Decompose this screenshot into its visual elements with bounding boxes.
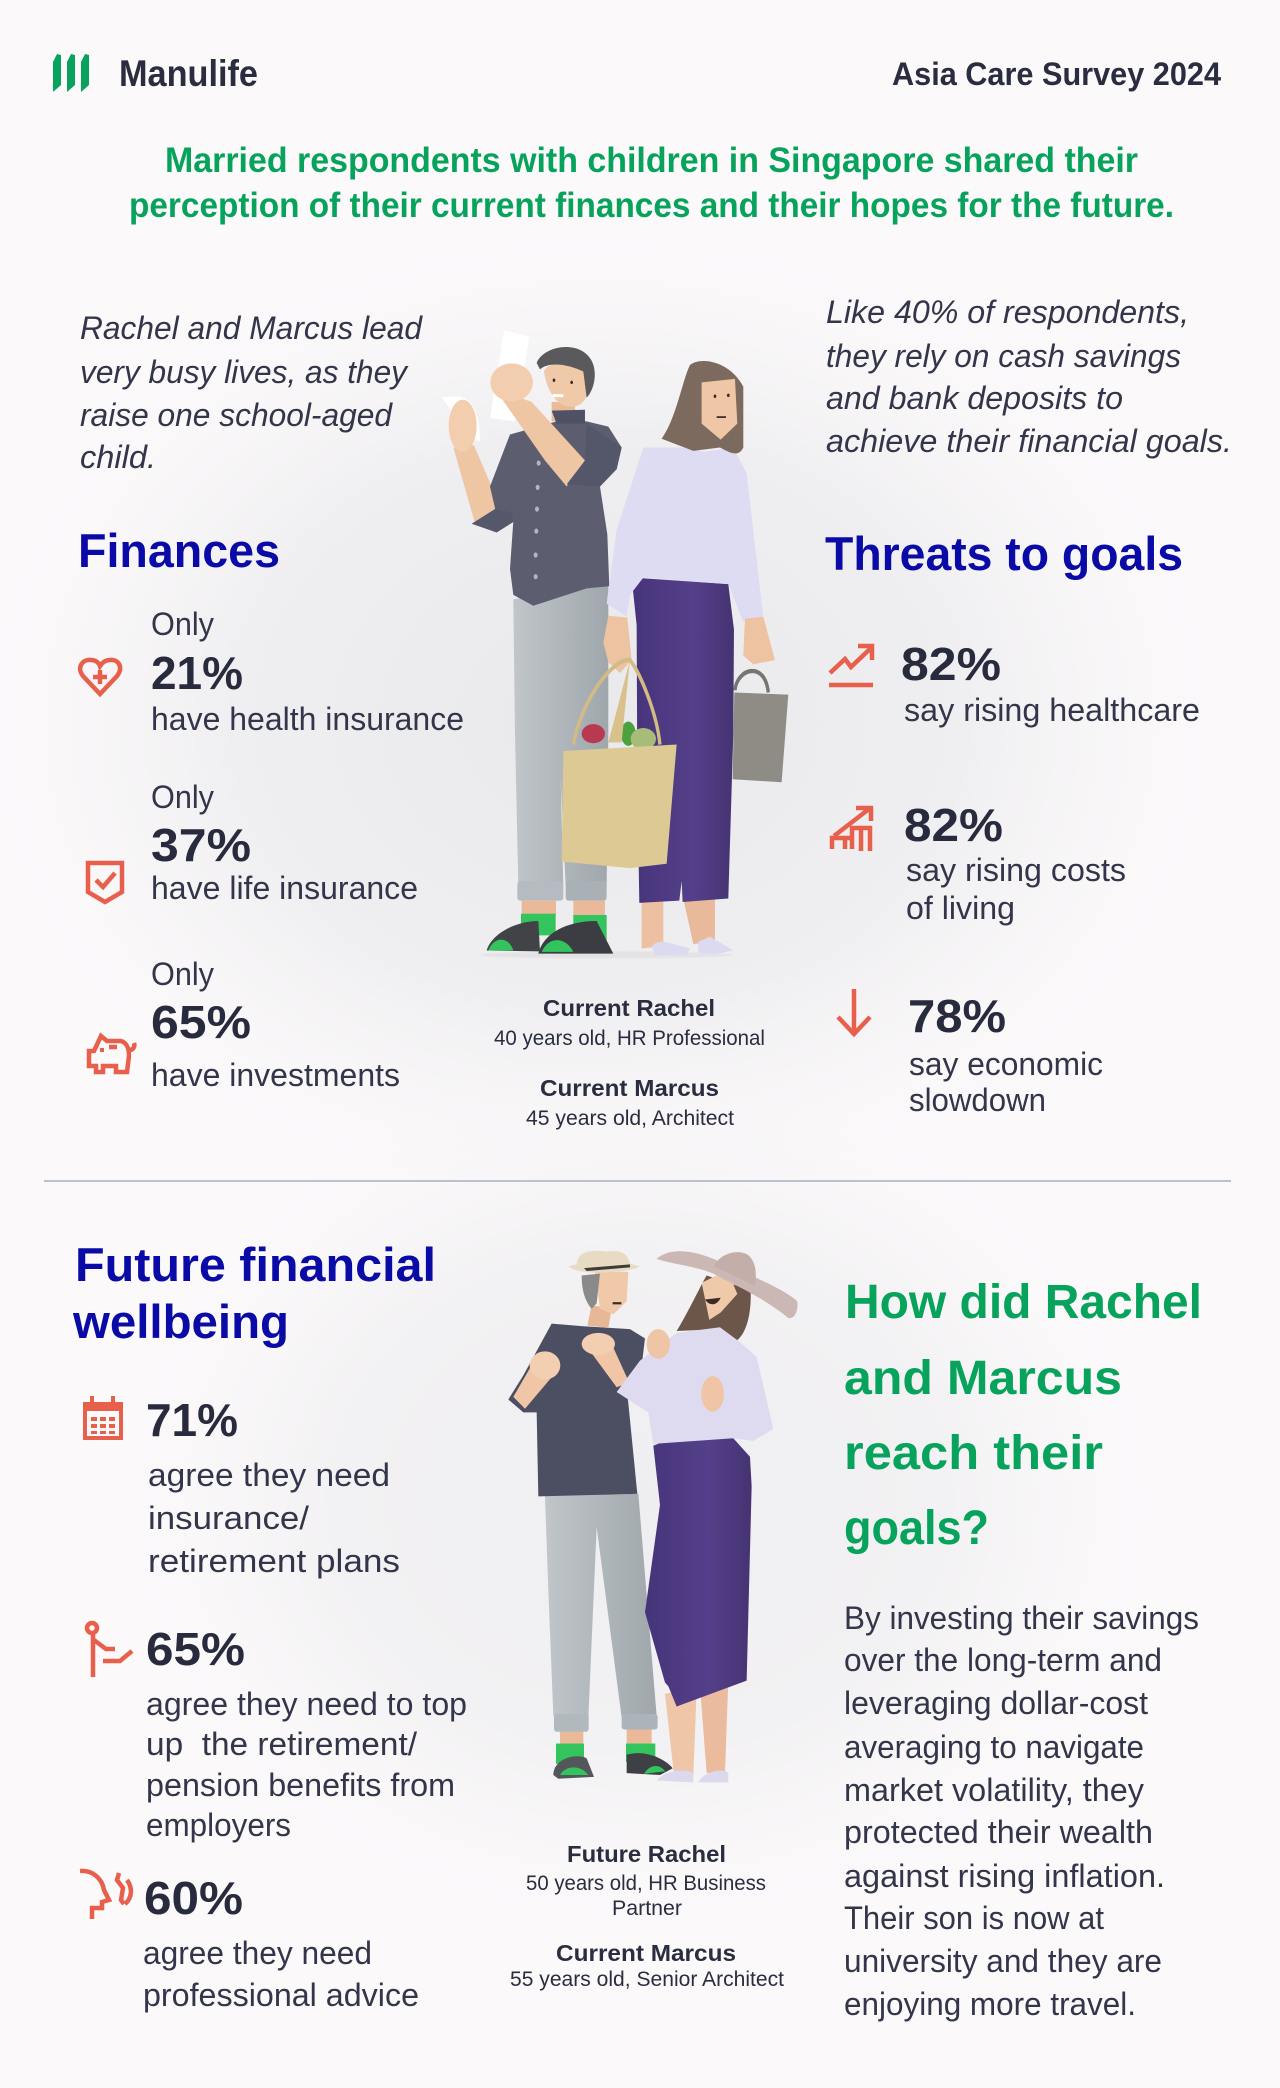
- heading: how did Rachel and Marcus reach their goals: [844, 1276, 1202, 1555]
- stat: healthcare: 82%: [901, 638, 1001, 690]
- stat: cost of living: 82%: [904, 799, 1003, 851]
- man: arms: [513, 1348, 629, 1409]
- text: intro right: Like 40% of respondents,: [826, 294, 1189, 330]
- man: hands: [530, 1333, 615, 1379]
- icon: down arrow: [838, 989, 870, 1034]
- stat: healthcare: [901, 638, 1200, 728]
- illustration: current Rachel and Marcus: [442, 330, 788, 958]
- stat: cost of living: say rising costs: [906, 852, 1126, 888]
- woman: hands: [603, 616, 775, 673]
- text: outcome: university and they are: [844, 1943, 1162, 1979]
- man: left cuff: [472, 509, 513, 532]
- text: intro left: [80, 310, 423, 475]
- text: outcome: enjoying more travel.: [844, 1986, 1136, 2022]
- caption: current couple: 45 years old, Architect: [526, 1107, 734, 1130]
- stat: 71%: 71%: [146, 1394, 238, 1446]
- text: outcome: protected their wealth: [844, 1814, 1153, 1850]
- man: head: [537, 347, 595, 424]
- text: intro right: and bank deposits to: [826, 380, 1123, 416]
- stat: investments: [151, 956, 400, 1093]
- stat: 71%: insurance/: [148, 1500, 309, 1536]
- man: receipts: [442, 330, 529, 441]
- text: outcome: averaging to navigate: [844, 1729, 1144, 1765]
- icon: calendar: [83, 1396, 122, 1438]
- survey title: Asia Care Survey 2024: [892, 56, 1221, 92]
- caption: future couple: 55 years old, Senior Architect: [510, 1968, 784, 1991]
- logo: Manulife: [53, 53, 258, 94]
- stat: cost of living: of living: [906, 890, 1015, 926]
- text: intro right: [826, 294, 1232, 459]
- woman: legs: [657, 1679, 728, 1782]
- man: legs: [545, 1494, 673, 1779]
- icon: piggy bank: [89, 1036, 134, 1072]
- stat: health insurance: have health insurance: [151, 701, 464, 737]
- heading: how did Rachel and Marcus reach their goals: goals?: [844, 1502, 989, 1555]
- bag: beige with groceries: [562, 660, 677, 868]
- caption: current couple: 40 years old, HR Professional: [494, 1027, 765, 1050]
- stat: 65%: agree they need to top: [146, 1686, 467, 1722]
- woman: hair: [677, 1276, 751, 1344]
- headline: [129, 141, 1174, 225]
- icon: heart with cross: [80, 660, 120, 694]
- stat: health insurance: Only: [151, 606, 214, 642]
- logo: Manulife: Manulife: [119, 53, 258, 94]
- text: outcome: leveraging dollar-cost: [844, 1685, 1148, 1721]
- stat: 65%: employers: [146, 1807, 291, 1843]
- stat: 71%: [146, 1394, 400, 1579]
- headline: perception of their current finances and their hopes for the future.: [129, 186, 1174, 225]
- stat: cost of living: [904, 799, 1126, 926]
- stat: health insurance: [151, 606, 464, 737]
- stat: 65%: 65%: [146, 1623, 245, 1675]
- man: shirt: [508, 1324, 645, 1496]
- icon: head speaking: [80, 1871, 131, 1919]
- caption: current couple: [494, 995, 765, 1130]
- heading: future: [72, 1238, 436, 1348]
- stat: investments: 65%: [151, 996, 251, 1048]
- caption: current couple: Current Rachel: [543, 995, 715, 1021]
- text: outcome: By investing their savings: [844, 1600, 1199, 1636]
- woman: skirt: [645, 1435, 752, 1707]
- panel: how did they reach goals: [844, 1276, 1202, 2022]
- stat: 65%: up the retirement/: [146, 1726, 417, 1762]
- stat: economic slowdown: slowdown: [909, 1082, 1046, 1118]
- stat: 71%: agree they need: [148, 1457, 390, 1493]
- panel: finances: [78, 524, 464, 1093]
- stat: economic slowdown: say economic: [909, 1046, 1103, 1082]
- stat: 60%: professional advice: [143, 1977, 419, 2013]
- icon: rising bars: [832, 808, 871, 851]
- man: legs: [487, 584, 613, 954]
- text: intro left: raise one school-aged: [80, 397, 393, 433]
- woman: top: [607, 447, 763, 622]
- caption: future couple: [510, 1841, 784, 1991]
- stat: life insurance: Only: [151, 779, 214, 815]
- text: intro left: Rachel and Marcus lead: [80, 310, 423, 346]
- heading: how did Rachel and Marcus reach their goals: reach their: [844, 1427, 1103, 1480]
- caption: future couple: Partner: [612, 1897, 682, 1920]
- text: outcome: Their son is now at: [844, 1900, 1104, 1936]
- text: outcome: over the long-term and: [844, 1642, 1162, 1678]
- stat: investments: have investments: [151, 1057, 400, 1093]
- heading: how did Rachel and Marcus reach their goals: How did Rachel: [845, 1276, 1202, 1329]
- panel: threats to goals: [825, 294, 1232, 1118]
- caption: future couple: Current Marcus: [556, 1940, 736, 1966]
- man: right arm: [490, 363, 622, 486]
- illustration: future Rachel and Marcus: [508, 1251, 797, 1782]
- man: head: [568, 1251, 640, 1328]
- icon: shield with check: [88, 863, 122, 902]
- stat: 65%: pension benefits from: [146, 1767, 455, 1803]
- stat: 71%: retirement plans: [148, 1543, 400, 1579]
- text: intro left: very busy lives, as they: [80, 354, 409, 390]
- stat: investments: Only: [151, 956, 214, 992]
- text: intro right: they rely on cash savings: [826, 338, 1181, 374]
- man: buttons: [534, 460, 541, 579]
- text: intro right: achieve their financial goals.: [826, 423, 1232, 459]
- woman: hat: [657, 1251, 797, 1318]
- man: left arm: [449, 400, 502, 523]
- stat: 60%: 60%: [144, 1872, 243, 1924]
- stat: health insurance: 21%: [151, 647, 243, 699]
- woman: hands: [647, 1329, 724, 1412]
- heading: threats: Threats to goals: [825, 527, 1183, 580]
- caption: future couple: 50 years old, HR Business: [526, 1872, 766, 1895]
- stat: life insurance: 37%: [151, 819, 251, 871]
- heading: future: wellbeing: [72, 1295, 289, 1348]
- stat: economic slowdown: 78%: [908, 990, 1006, 1042]
- stat: life insurance: have life insurance: [151, 870, 418, 906]
- icon: person with hand: [87, 1623, 132, 1677]
- stat: life insurance: [151, 779, 418, 906]
- stat: healthcare: say rising healthcare: [904, 692, 1200, 728]
- heading: how did Rachel and Marcus reach their goals: and Marcus: [844, 1352, 1122, 1405]
- stat: 60%: [143, 1872, 419, 2013]
- text: outcome: market volatility, they: [844, 1772, 1144, 1808]
- caption: future couple: Future Rachel: [567, 1841, 726, 1867]
- heading: future: Future financial: [75, 1238, 436, 1291]
- woman: blouse: [617, 1327, 773, 1444]
- woman: trousers: [632, 578, 734, 903]
- text: outcome: [844, 1600, 1199, 2022]
- stat: economic slowdown: [908, 990, 1103, 1118]
- man: shirt: [490, 421, 622, 606]
- caption: current couple: Current Marcus: [540, 1075, 719, 1101]
- woman: head: [662, 361, 743, 453]
- heading: finances: Finances: [78, 524, 280, 577]
- stat: 60%: agree they need: [143, 1935, 372, 1971]
- stat: 65%: [146, 1623, 467, 1843]
- text: intro left: child.: [80, 439, 156, 475]
- woman: face: [702, 1270, 737, 1320]
- bag: grey: [733, 671, 788, 782]
- woman: legs: [642, 894, 733, 955]
- panel: future financial wellbeing: [72, 1238, 467, 2013]
- text: outcome: against rising inflation.: [844, 1858, 1165, 1894]
- icon: rising trend: [829, 646, 873, 685]
- headline: Married respondents with children in Singapore shared their: [165, 141, 1138, 180]
